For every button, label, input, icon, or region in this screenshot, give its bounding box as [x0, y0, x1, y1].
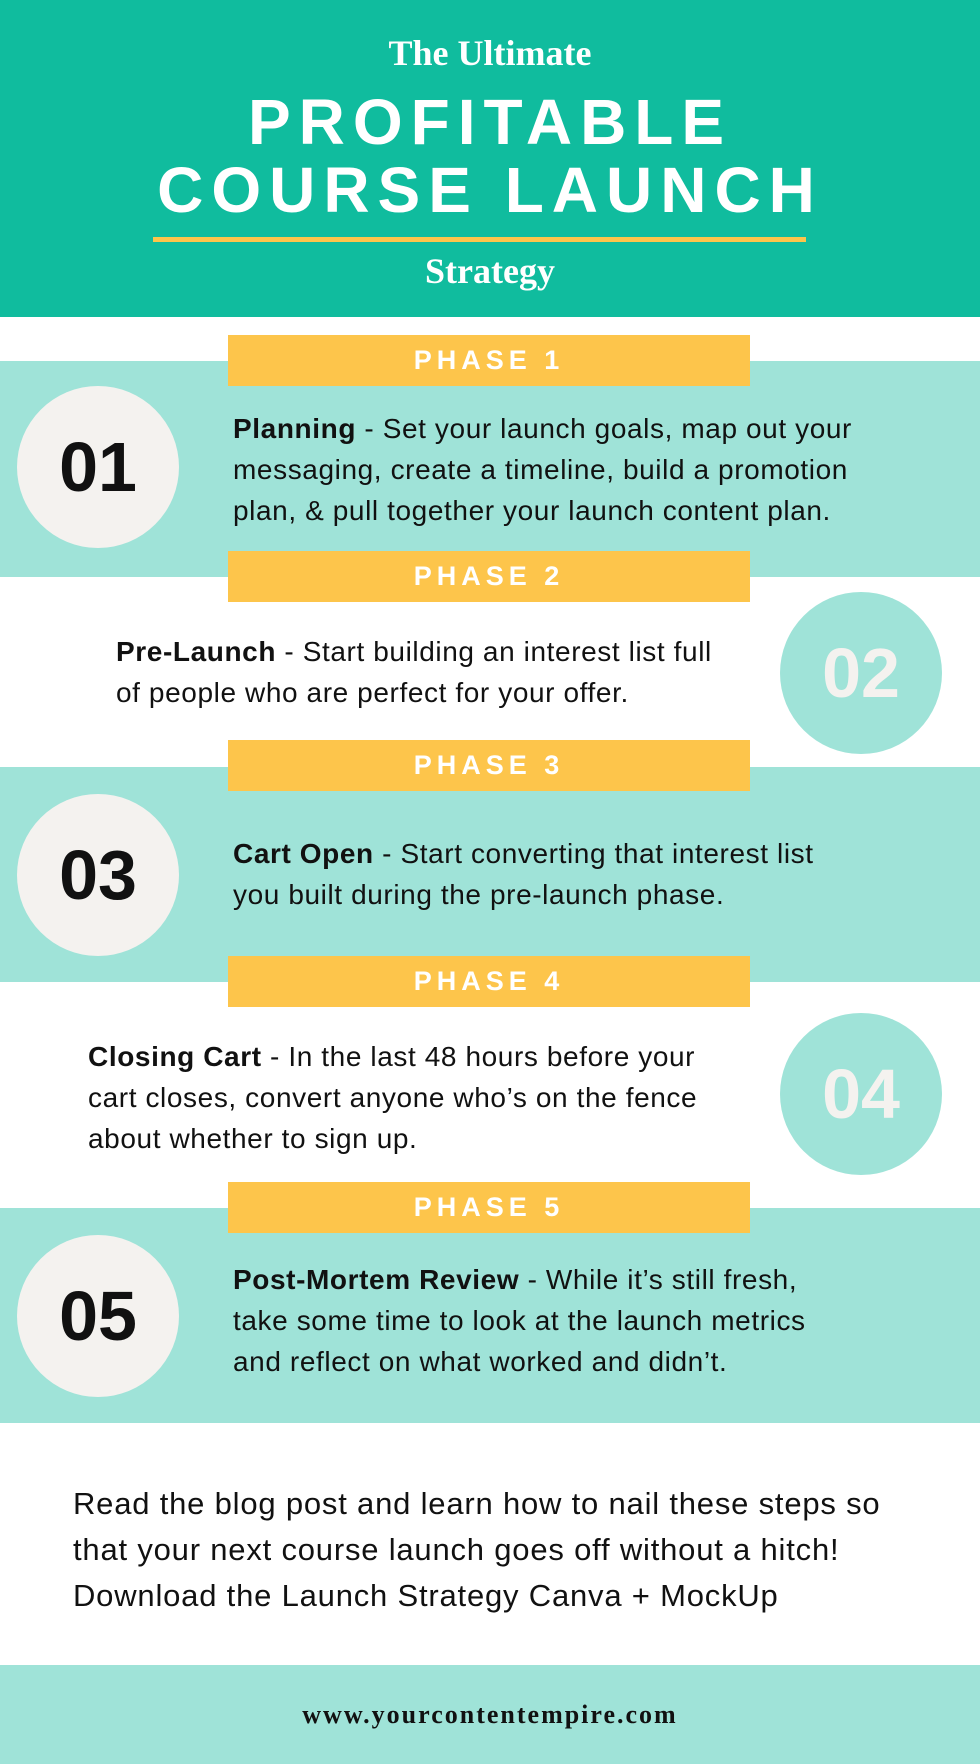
text phase 4 — [88, 1041, 697, 1154]
circle 02 — [780, 592, 942, 754]
phase 1 label: PHASE 1 — [414, 345, 564, 375]
text phase 1: plan, & pull together your launch content plan. — [233, 495, 831, 526]
circle 05: 05 — [59, 1277, 137, 1355]
text phase 2: Pre-Launch - Start building an interest list full — [116, 636, 712, 667]
text phase 5 — [233, 1264, 806, 1377]
phase 1 label — [228, 335, 750, 386]
title: the ultimate: The Ultimate — [389, 33, 591, 73]
url: www.yourcontentempire.com — [302, 1700, 678, 1729]
text phase 1 — [233, 413, 852, 526]
title: main: COURSE LAUNCH — [157, 154, 823, 226]
circle 03 — [17, 794, 179, 956]
phase 5 label — [228, 1182, 750, 1233]
panel: phase 3 — [0, 767, 980, 982]
phase 3 label: PHASE 3 — [414, 750, 564, 780]
footer bar — [0, 1665, 980, 1764]
text phase 3 — [233, 838, 814, 910]
text phase 3: Cart Open - Start converting that interest list — [233, 838, 814, 869]
footer text: that your next course launch goes off without a hitch! — [73, 1532, 839, 1567]
title: main — [157, 86, 823, 226]
underline — [153, 237, 806, 242]
phase 2 label — [228, 551, 750, 602]
panel: phase 5 — [0, 1208, 980, 1423]
phase 5 label: PHASE 5 — [414, 1192, 564, 1222]
text phase 1: Planning - Set your launch goals, map out your — [233, 413, 852, 444]
text phase 5: Post-Mortem Review - While it’s still fresh, — [233, 1264, 797, 1295]
text phase 4: about whether to sign up. — [88, 1123, 417, 1154]
circle 04: 04 — [822, 1055, 900, 1133]
panel: phase 1 — [0, 361, 980, 577]
text phase 2: of people who are perfect for your offer. — [116, 677, 629, 708]
text phase 4: cart closes, convert anyone who’s on the fence — [88, 1082, 697, 1113]
text phase 3: you built during the pre-launch phase. — [233, 879, 724, 910]
circle 02: 02 — [822, 634, 900, 712]
text phase 1: messaging, create a timeline, build a promotion — [233, 454, 848, 485]
circle 01 — [17, 386, 179, 548]
footer text: Download the Launch Strategy Canva + MockUp — [73, 1578, 779, 1613]
text phase 2 — [116, 636, 712, 708]
circle 04 — [780, 1013, 942, 1175]
footer text: Read the blog post and learn how to nail these steps so — [73, 1486, 880, 1521]
circle 01: 01 — [59, 428, 137, 506]
text phase 4: Closing Cart - In the last 48 hours before your — [88, 1041, 695, 1072]
circle 05 — [17, 1235, 179, 1397]
text phase 5: take some time to look at the launch metrics — [233, 1305, 806, 1336]
circle 03: 03 — [59, 836, 137, 914]
footer text — [73, 1486, 880, 1613]
phase 3 label — [228, 740, 750, 791]
phase 2 label: PHASE 2 — [414, 561, 564, 591]
header — [0, 0, 980, 317]
phase 4 label — [228, 956, 750, 1007]
subtitle: Strategy — [425, 251, 555, 291]
text phase 5: and reflect on what worked and didn’t. — [233, 1346, 727, 1377]
phase 4 label: PHASE 4 — [414, 966, 564, 996]
title: main: PROFITABLE — [248, 86, 732, 158]
